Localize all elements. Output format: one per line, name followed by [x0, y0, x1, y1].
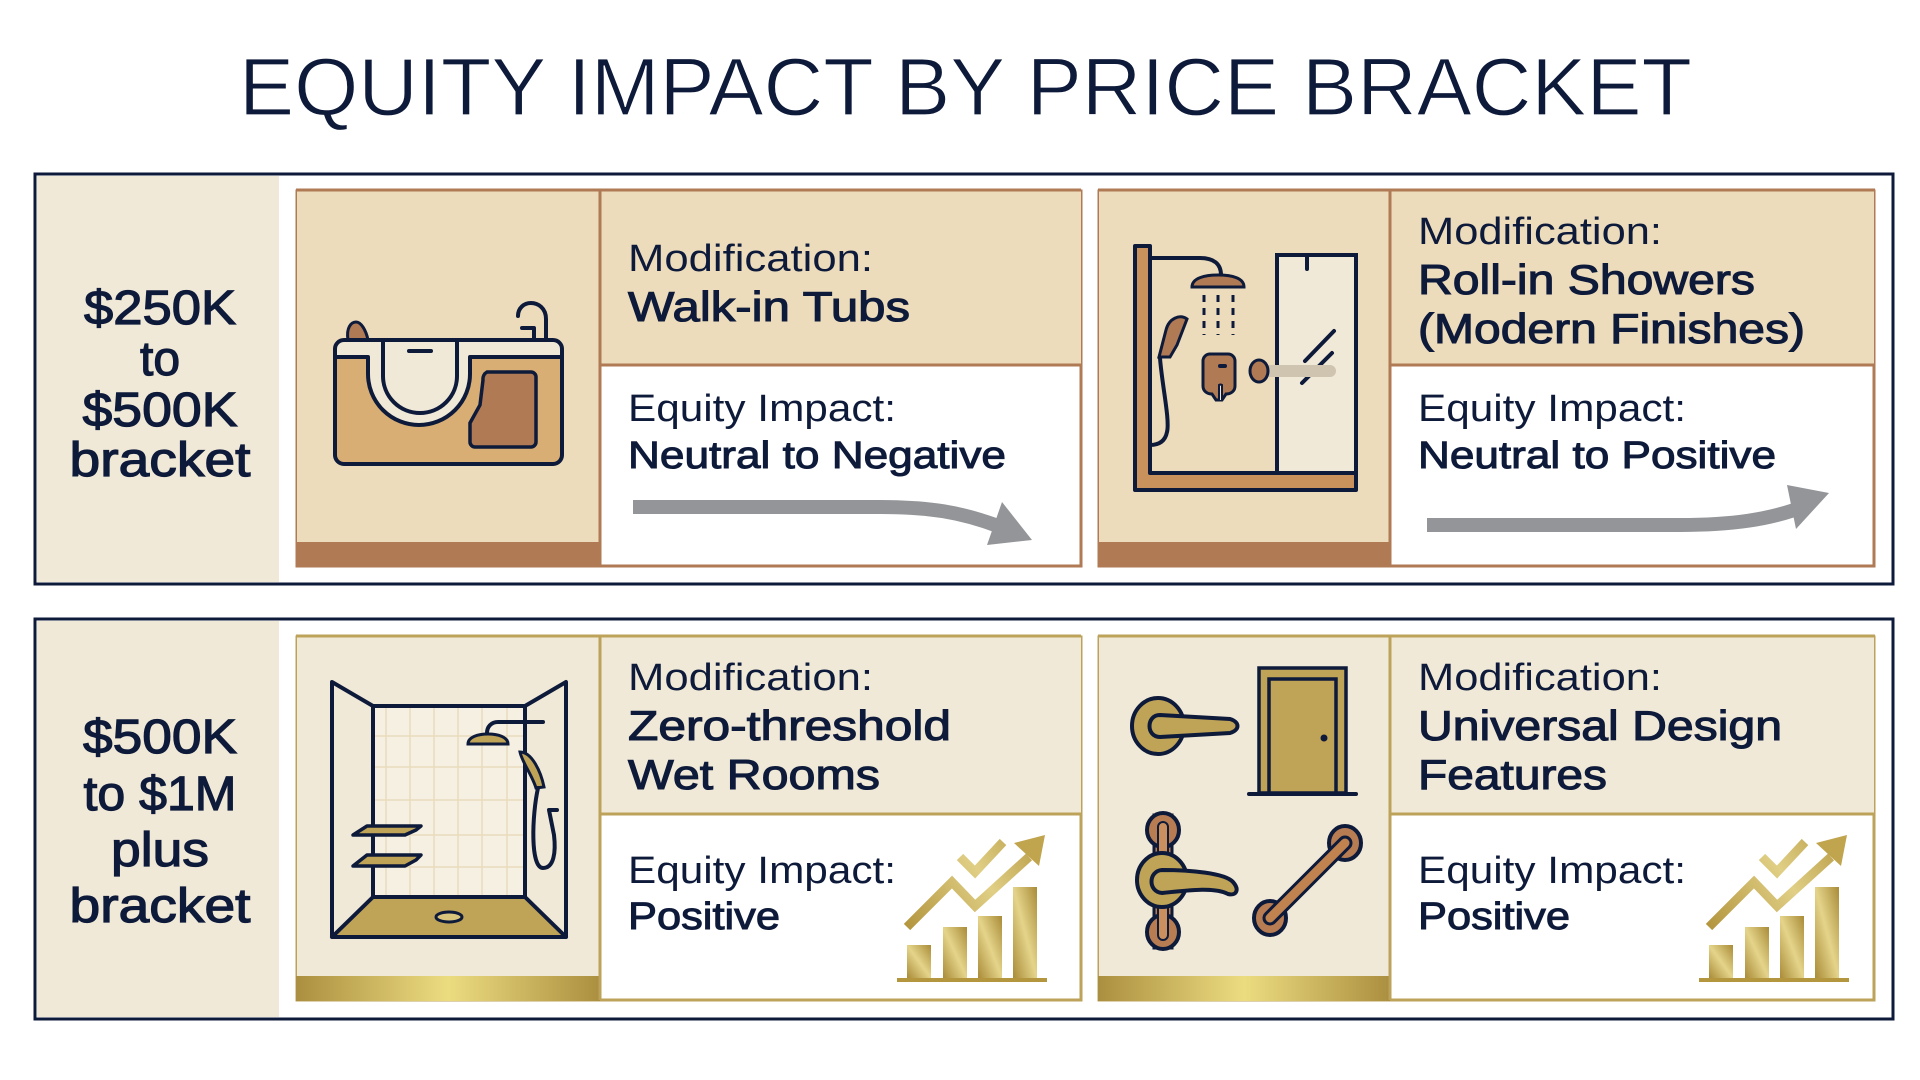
- equity impact text: Equity Impact:: [628, 850, 896, 892]
- modification text: Wet Rooms: [628, 751, 880, 798]
- bracket label panel: $500K: [83, 711, 237, 764]
- equity impact text: Equity Impact:: [1418, 388, 1686, 430]
- modification text: [628, 238, 910, 330]
- panel: $500K to $1M plus bracket: [35, 619, 1893, 1019]
- equity impact text: [1418, 850, 1686, 938]
- chart: rising bars with arrow and check: [897, 835, 1047, 982]
- equity impact text: Equity Impact:: [1418, 850, 1686, 892]
- panel: $250K to $500K bracket: [35, 174, 1893, 584]
- bracket label panel: $250K: [84, 282, 236, 335]
- modification text: [628, 657, 951, 798]
- modification text: Roll-in Showers: [1418, 256, 1755, 303]
- modification text: Walk-in Tubs: [628, 283, 910, 330]
- equity impact text: [628, 850, 896, 938]
- bracket label panel: [37, 176, 279, 582]
- modification text: Features: [1418, 751, 1607, 798]
- card: roll-in showers: [1098, 190, 1875, 566]
- bracket label panel: to: [140, 333, 180, 386]
- bracket label panel: bracket: [70, 880, 250, 933]
- arrow: downward trend: [633, 502, 1032, 545]
- equity impact text: [1418, 388, 1776, 477]
- modification text: Modification:: [628, 238, 873, 280]
- icon: wet room: [332, 682, 566, 937]
- modification text: Modification:: [1418, 211, 1662, 253]
- bracket label panel: plus: [111, 824, 209, 877]
- card: zero-threshold wet rooms: [296, 636, 1081, 1001]
- title: EQUITY IMPACT BY PRICE BRACKET: [239, 42, 1692, 133]
- modification text: Universal Design: [1418, 702, 1782, 749]
- bracket label panel: to $1M: [84, 768, 236, 821]
- modification text: Zero-threshold: [628, 702, 951, 749]
- icon: roll-in shower: [1135, 246, 1356, 490]
- chart: rising bars with arrow and check: [1699, 835, 1849, 982]
- bracket label panel: [37, 621, 279, 1017]
- modification text: [1418, 211, 1805, 352]
- icon: lever handle: [1132, 698, 1238, 754]
- icon: diagonal grab bar: [1254, 826, 1361, 935]
- icon: lever with grab rail: [1137, 813, 1237, 949]
- card: universal design features: [1098, 636, 1875, 1001]
- equity impact text: [628, 388, 1006, 477]
- equity impact text: Neutral to Negative: [628, 435, 1006, 477]
- modification text: Modification:: [628, 657, 873, 699]
- equity impact text: Positive: [628, 896, 780, 938]
- card: walk-in tubs: [296, 190, 1081, 566]
- icon: walk-in tub: [335, 303, 562, 464]
- modification text: [1418, 657, 1782, 798]
- modification text: Modification:: [1418, 657, 1662, 699]
- arrow: upward trend: [1427, 485, 1829, 529]
- bracket label panel: bracket: [70, 434, 250, 487]
- bracket label panel: $500K: [82, 384, 238, 437]
- equity impact text: Neutral to Positive: [1418, 435, 1776, 477]
- equity impact text: Positive: [1418, 896, 1570, 938]
- modification text: (Modern Finishes): [1418, 305, 1805, 352]
- equity impact text: Equity Impact:: [628, 388, 896, 430]
- icon: wide door: [1249, 668, 1356, 794]
